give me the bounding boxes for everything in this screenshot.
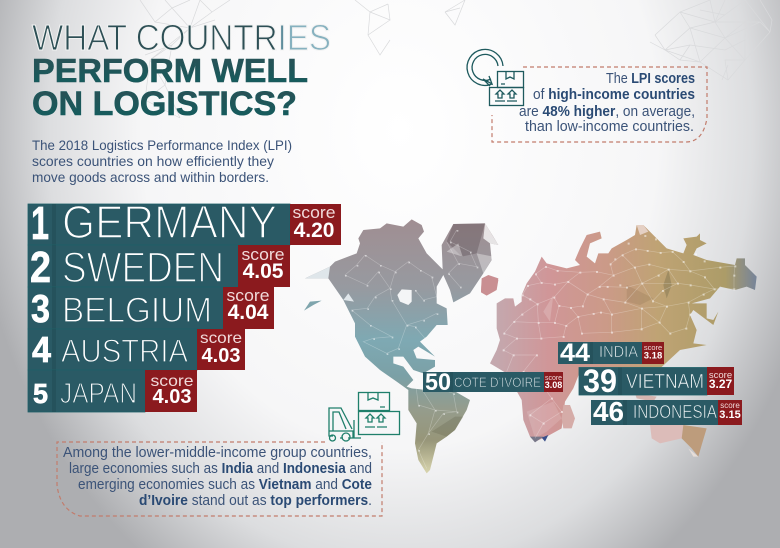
callout text: are 48% higher, on average, bbox=[519, 104, 695, 120]
callout border bbox=[57, 442, 382, 516]
row 1: Germany: 1 bbox=[31, 197, 49, 249]
label: Vietnam: 3.27 bbox=[709, 377, 733, 391]
row 5: Japan: 5 bbox=[33, 378, 48, 409]
intro text: move goods across and within borders. bbox=[32, 169, 269, 185]
callout text bbox=[63, 445, 372, 509]
callout text: Among the lower-middle-income group countries, bbox=[63, 445, 372, 461]
icon: box with circular arrow bbox=[467, 49, 524, 106]
intro text: The 2018 Logistics Performance Index (LPI) bbox=[32, 137, 292, 153]
label: Indonesia bbox=[591, 396, 742, 427]
row 2: Sweden: SWEDEN bbox=[62, 244, 224, 292]
row 5: Japan bbox=[28, 370, 197, 412]
row 5: Japan: score bbox=[150, 373, 194, 390]
label: Cote d'Ivoire: 3.08 bbox=[545, 380, 562, 390]
row 3: Belgium: BELGIUM bbox=[62, 291, 212, 330]
label: Vietnam: VIETNAM bbox=[626, 371, 704, 393]
island bbox=[481, 278, 498, 296]
row 1: Germany: score bbox=[292, 203, 336, 222]
callout text: of high-income countries bbox=[533, 87, 695, 103]
label: India: score bbox=[644, 343, 662, 352]
island right bbox=[481, 275, 498, 295]
label: Cote d'Ivoire bbox=[423, 369, 563, 396]
callout text: than low-income countries. bbox=[525, 119, 694, 135]
callout: high-income LPI bbox=[492, 67, 707, 142]
row 1: Germany: GERMANY bbox=[62, 196, 277, 248]
lake cutout bbox=[397, 289, 412, 305]
label: India bbox=[558, 339, 664, 367]
row 1: Germany: 4.20 bbox=[294, 219, 334, 242]
label: Indonesia: INDONESIA bbox=[633, 402, 717, 422]
world map bbox=[304, 219, 757, 473]
callout text: large economies such as India and Indonesia and bbox=[69, 461, 372, 477]
label: Indonesia: 46 bbox=[593, 396, 624, 427]
row 4: Austria bbox=[28, 329, 245, 370]
row 3: Belgium: score bbox=[226, 286, 270, 305]
Indonesia and Australia bbox=[635, 393, 657, 402]
ranking list bbox=[28, 196, 341, 412]
row 4: Austria: 4.03 bbox=[202, 345, 240, 367]
row 3: Belgium bbox=[28, 286, 274, 331]
label: Cote d'Ivoire: 50 bbox=[425, 369, 451, 396]
row 2: Sweden: 4.05 bbox=[243, 260, 284, 283]
label: India: INDIA bbox=[599, 344, 638, 361]
callout text: The LPI scores bbox=[606, 71, 695, 87]
island bbox=[304, 301, 322, 311]
icon: forklift with boxes bbox=[329, 392, 400, 441]
callout text: d’Ivoire stand out as top performers. bbox=[139, 493, 372, 509]
label: India: 44 bbox=[560, 339, 590, 367]
title line 3: ON LOGISTICS? bbox=[32, 85, 297, 123]
facets bbox=[627, 285, 653, 305]
label: Vietnam bbox=[579, 363, 734, 399]
row 4: Austria: score bbox=[200, 330, 242, 347]
title line 2: PERFORM WELL bbox=[32, 52, 308, 89]
label: Cote d'Ivoire: COTE D’IVOIRE bbox=[454, 374, 541, 390]
label: Indonesia: score bbox=[720, 401, 740, 410]
label: India: 3.18 bbox=[644, 350, 662, 362]
row 2: Sweden: score bbox=[242, 245, 284, 264]
label: Cote d'Ivoire: score bbox=[545, 375, 562, 382]
callout text bbox=[519, 71, 695, 135]
row 4: Austria: 4 bbox=[32, 329, 51, 370]
decorative mesh top bbox=[140, 0, 772, 118]
title line 1: WHAT COUNTRIES bbox=[32, 17, 331, 58]
title bbox=[32, 17, 331, 123]
label: Vietnam: 39 bbox=[583, 363, 617, 399]
callout border bbox=[492, 67, 707, 142]
row 4: Austria: AUSTRIA bbox=[61, 333, 189, 369]
map: Eurasia and Africa bbox=[481, 225, 757, 457]
row 3: Belgium: 3 bbox=[31, 288, 50, 331]
row 2: Sweden: 2 bbox=[30, 243, 51, 292]
row 5: Japan: JAPAN bbox=[60, 378, 137, 410]
row 5: Japan: 4.03 bbox=[153, 386, 191, 408]
label: Vietnam: score bbox=[709, 370, 732, 381]
callout: lower-middle-income bbox=[57, 442, 382, 516]
intro text: scores countries on how efficiently they bbox=[32, 153, 274, 169]
Greenland facets bbox=[447, 223, 485, 257]
map: Americas bbox=[304, 219, 498, 473]
intro text bbox=[32, 137, 292, 185]
row 3: Belgium: 4.04 bbox=[228, 301, 269, 324]
callout text: emerging economies such as Vietnam and Cote bbox=[78, 477, 372, 493]
label: Indonesia: 3.15 bbox=[719, 409, 741, 421]
